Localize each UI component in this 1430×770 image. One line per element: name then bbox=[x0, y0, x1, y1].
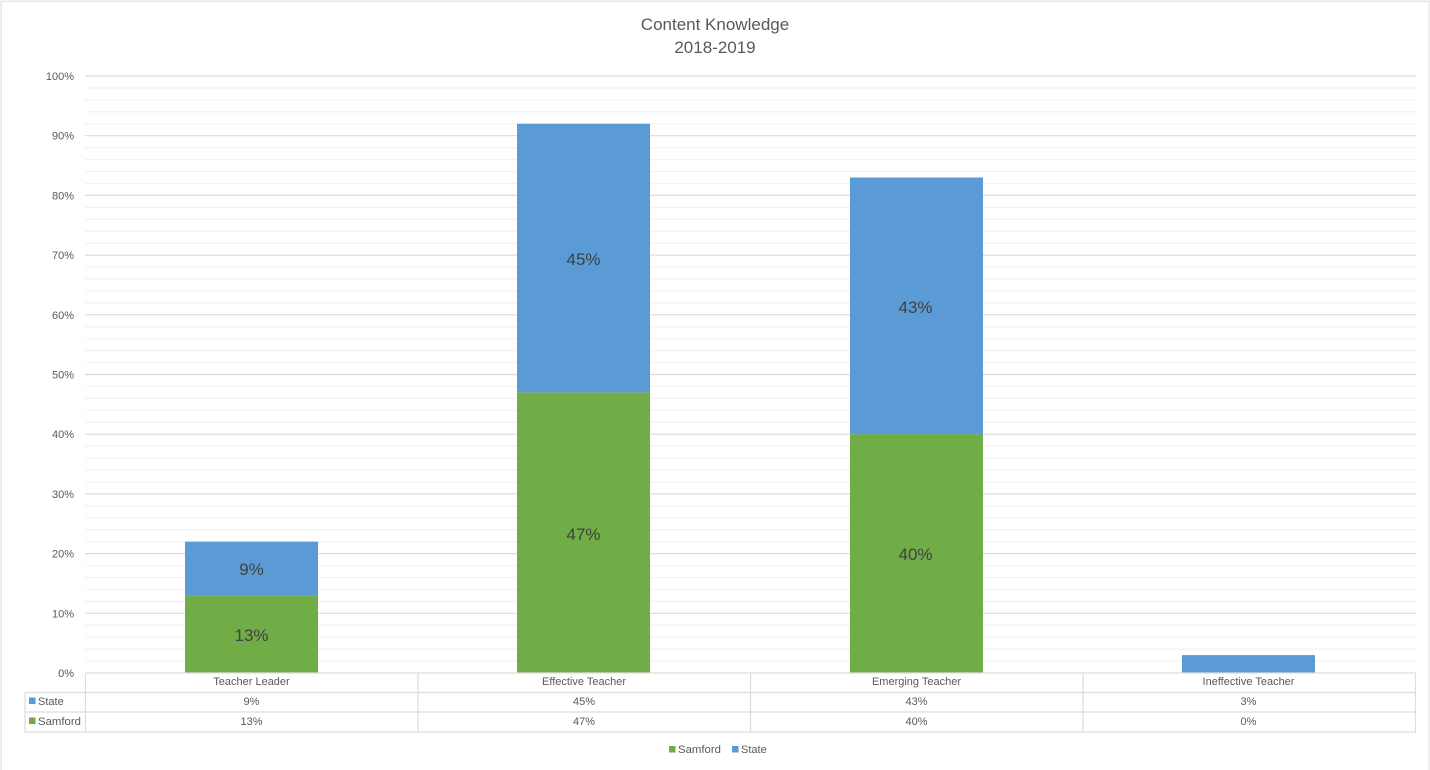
bar: Emerging Teacher bbox=[850, 178, 983, 673]
bar: Teacher Leader bbox=[185, 542, 318, 673]
y axis labels: 40% bbox=[52, 429, 74, 441]
bar: Effective Teacher: 47% bbox=[566, 525, 601, 544]
y axis labels: 0% bbox=[58, 668, 74, 680]
legend bbox=[669, 744, 767, 756]
y axis labels: 100% bbox=[46, 71, 74, 83]
y axis labels: 60% bbox=[52, 310, 74, 322]
table row: Samford values: 40% bbox=[905, 716, 928, 728]
title: Content Knowledge bbox=[641, 15, 789, 34]
data table bbox=[25, 673, 1416, 732]
bar: Ineffective Teacher bbox=[1182, 655, 1315, 673]
table row: Samford values: 47% bbox=[573, 716, 595, 728]
table column headers: Ineffective Teacher bbox=[1203, 676, 1295, 688]
bar: Emerging Teacher: 40% bbox=[898, 545, 933, 564]
bar: Effective Teacher: 45% bbox=[566, 250, 601, 269]
table legend: State: State bbox=[38, 696, 64, 708]
bar: Emerging Teacher: 43% bbox=[898, 298, 933, 317]
bar: Teacher Leader: 9% bbox=[239, 560, 264, 579]
y axis labels: 90% bbox=[52, 131, 74, 143]
y axis labels: 80% bbox=[52, 190, 74, 202]
table row: Samford values: 0% bbox=[1241, 716, 1257, 728]
y axis labels: 30% bbox=[52, 489, 74, 501]
table column headers: Teacher Leader bbox=[213, 676, 290, 688]
table row: Samford values: 13% bbox=[240, 716, 263, 728]
table legend: Samford: Samford bbox=[38, 716, 81, 728]
title bbox=[641, 15, 789, 57]
table column headers: Emerging Teacher bbox=[872, 676, 961, 688]
y axis labels: 10% bbox=[52, 608, 74, 620]
table row: State values bbox=[244, 696, 1257, 708]
bar: Teacher Leader: 13% bbox=[234, 626, 269, 645]
table row: State values: 3% bbox=[1241, 696, 1257, 708]
y axis labels: 20% bbox=[52, 549, 74, 561]
table column headers bbox=[213, 676, 1295, 688]
table row: State values: 45% bbox=[573, 696, 595, 708]
table row: Samford values bbox=[240, 716, 1257, 728]
y axis labels: 50% bbox=[52, 370, 74, 382]
y axis labels bbox=[46, 71, 74, 680]
table row: State values: 43% bbox=[905, 696, 928, 708]
table column headers: Effective Teacher bbox=[542, 676, 626, 688]
legend: State bbox=[741, 744, 767, 756]
bar: Effective Teacher bbox=[517, 124, 650, 673]
legend: Samford bbox=[678, 744, 721, 756]
table row: State values: 9% bbox=[244, 696, 260, 708]
title: 2018-2019 bbox=[674, 38, 756, 57]
y axis labels: 70% bbox=[52, 250, 74, 262]
